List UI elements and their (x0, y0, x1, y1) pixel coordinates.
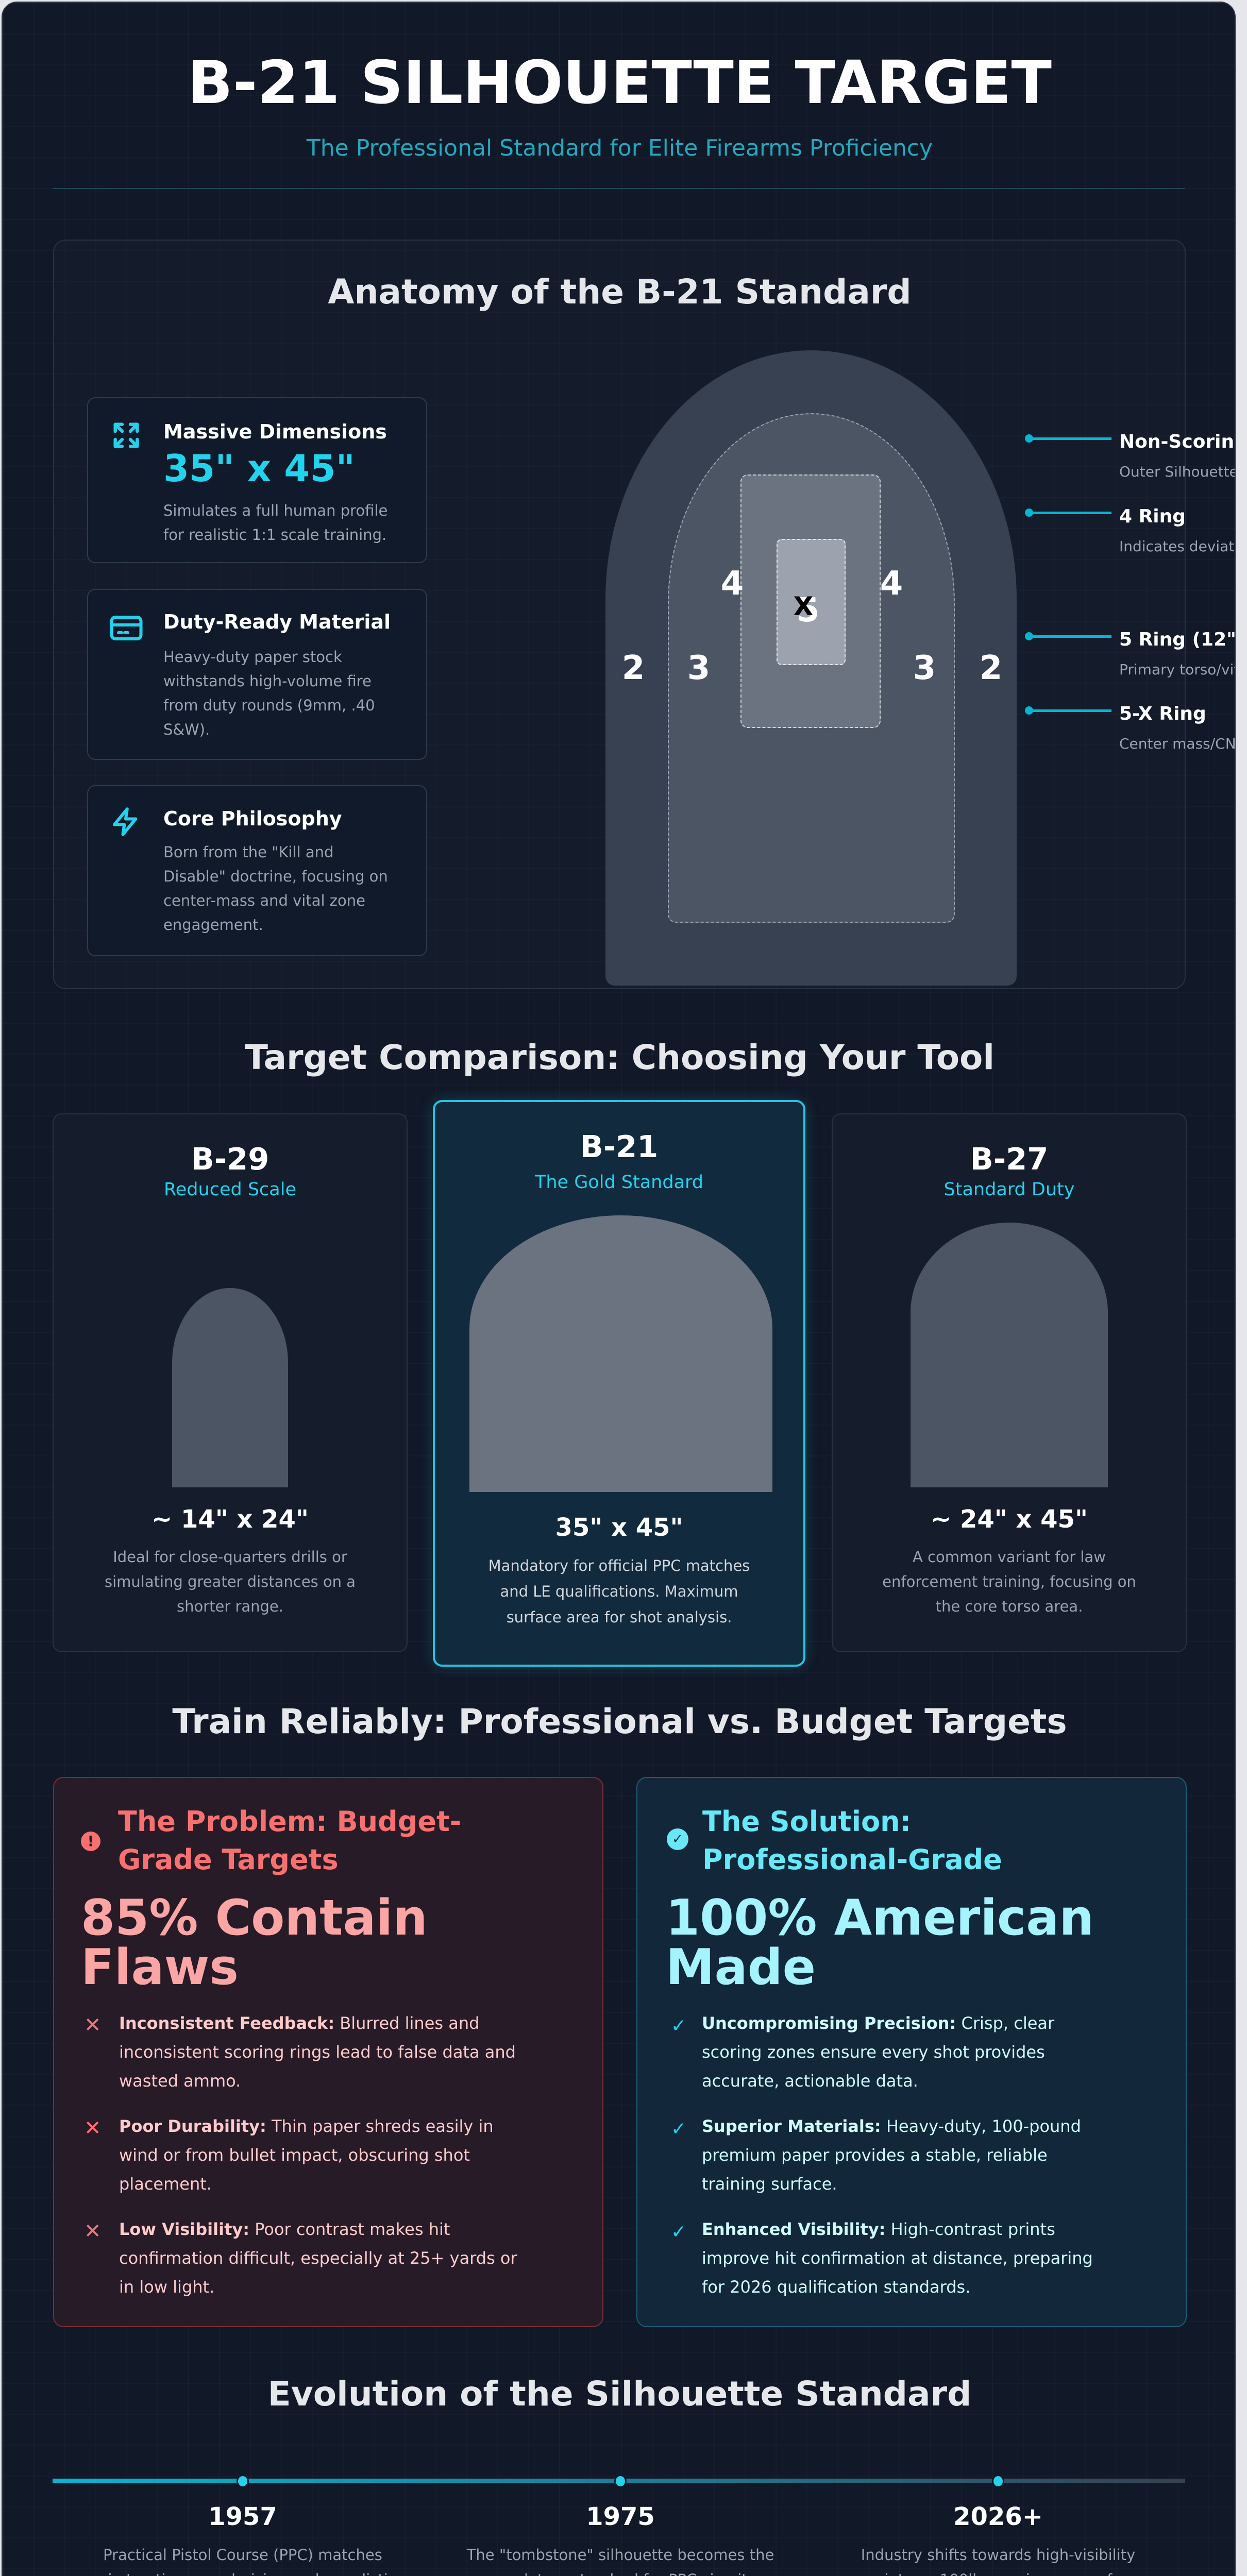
milestone: 1957: 1957 (208, 2502, 277, 2531)
card: B-21: surface area for shot analysis. (507, 1608, 732, 1626)
card: B-29: ~ 14" x 24" (151, 1505, 309, 1534)
silhouette: B-21 (469, 1215, 772, 1492)
icon: expand arrows (113, 422, 139, 448)
feature card: core philosophy (87, 785, 427, 956)
list: pro benefits: ✓ (671, 2119, 686, 2140)
list: pro benefits: improve hit confirmation at distance, preparing (702, 2248, 1093, 2268)
icon: check circle (667, 1828, 688, 1850)
heading: evolution: Evolution of the Silhouette Standard (268, 2374, 971, 2414)
callout: 5-X ring: 5-X Ring (1119, 703, 1206, 724)
target diagram: 4 (880, 565, 903, 603)
panel: budget problem: The Problem: Budget- (118, 1805, 461, 1838)
heading: comparison: Target Comparison: Choosing Your Tool (245, 1038, 995, 1077)
callout: 5-X ring (1025, 703, 1236, 752)
target diagram: 4 (721, 565, 744, 603)
milestone: 1975: The "tombstone" silhouette becomes the (467, 2546, 774, 2564)
card: B-29: shorter range. (177, 1598, 283, 1615)
callout: non-scoring (1025, 431, 1236, 480)
card: B-21 (433, 1100, 805, 1667)
card: B-27: Standard Duty (944, 1179, 1074, 1200)
list: budget flaws: in low light. (119, 2277, 214, 2297)
card: B-27: ~ 24" x 45" (931, 1505, 1088, 1534)
list: pro benefits: Enhanced Visibility: High-contrast prints (702, 2219, 1055, 2239)
card: B-29: Ideal for close-quarters drills or (113, 1548, 347, 1566)
panel: anatomy (53, 240, 1186, 989)
icon: card (110, 616, 142, 640)
target diagram: 3 (687, 649, 710, 687)
icon: check circle: ✓ (672, 1832, 683, 1847)
card: B-21: Mandatory for official PPC matches (488, 1557, 750, 1574)
list: budget flaws: ✕ (84, 2219, 102, 2243)
card: B-29 (53, 1113, 408, 1652)
silhouette: B-29 (172, 1288, 288, 1487)
list: pro benefits: ✓ (671, 2015, 686, 2037)
milestone: 1975 (467, 2502, 774, 2576)
panel: professional solution: Made (666, 1939, 816, 1996)
feature card: massive dimensions: Massive Dimensions (163, 420, 387, 443)
feature card: duty-ready material: from duty rounds (9mm, .40 (163, 697, 375, 714)
milestone: 2026+: 2026+ (953, 2502, 1043, 2531)
milestone: 2026+ (861, 2502, 1135, 2576)
heading: anatomy: Anatomy of the B-21 Standard (328, 272, 912, 312)
list: budget flaws: confirmation difficult, especially at 25+ yards or (119, 2248, 517, 2268)
list: pro benefits: premium paper provides a stable, reliable (702, 2145, 1048, 2165)
feature card: massive dimensions: 35" x 45" (163, 447, 355, 490)
target diagram: X (794, 591, 813, 621)
list: budget flaws (84, 2013, 517, 2297)
card: B-27: enforcement training, focusing on (882, 1573, 1136, 1590)
target diagram: 3 (913, 649, 936, 687)
list: budget flaws: wind or from bullet impact, obscuring shot (119, 2145, 470, 2165)
feature card: duty-ready material: S&W). (163, 721, 210, 738)
card: B-21: and LE qualifications. Maximum (500, 1583, 738, 1600)
list: budget flaws: Low Visibility: Poor contrast makes hit (119, 2219, 450, 2239)
target diagram: 5 (797, 591, 819, 630)
card: B-21: B-21 (580, 1129, 658, 1164)
target diagram: 2 (980, 649, 1002, 687)
silhouette: B-27 (911, 1223, 1108, 1487)
card: B-27: A common variant for law (913, 1548, 1106, 1566)
panel: budget problem (53, 1777, 603, 2327)
list: pro benefits: ✓ (671, 2222, 686, 2243)
panel: professional solution (636, 1777, 1187, 2327)
card: B-27: B-27 (970, 1141, 1048, 1177)
icon: alert: ! (88, 1833, 94, 1850)
list: budget flaws: ✕ (84, 2116, 102, 2140)
feature card: duty-ready material: Duty-Ready Material (163, 611, 391, 633)
target diagram: 2 (622, 649, 645, 687)
feature card: duty-ready material: Heavy-duty paper stock (163, 648, 342, 666)
callout: 4 ring: 4 Ring (1119, 506, 1186, 527)
milestone: 1975: 1975 (586, 2502, 655, 2531)
feature card: massive dimensions: Simulates a full human profile (163, 502, 387, 519)
card: B-29: simulating greater distances on a (105, 1573, 356, 1590)
timeline (53, 2476, 1185, 2486)
zone: 3 ring (668, 413, 955, 923)
feature card: duty-ready material: withstands high-volume fire (163, 672, 372, 690)
card: B-29: B-29 (191, 1141, 269, 1177)
feature card: massive dimensions (87, 397, 427, 563)
list: pro benefits: training surface. (702, 2174, 837, 2194)
callout: non-scoring: Outer Silhouette (1119, 463, 1236, 480)
heading: pro vs budget: Train Reliably: Professional vs. Budget Targets (172, 1702, 1067, 1741)
feature card: core philosophy: Disable" doctrine, focusing on (163, 868, 388, 885)
card: B-27 (832, 1113, 1187, 1652)
milestone: 1957 (89, 2502, 396, 2576)
list: budget flaws: inconsistent scoring rings lead to false data and (119, 2042, 516, 2062)
panel: professional solution: Professional-Grade (702, 1843, 1002, 1876)
panel: professional solution: The Solution: (702, 1805, 911, 1838)
list: pro benefits: Uncompromising Precision: Crisp, clear (702, 2013, 1054, 2033)
callout: 4 ring (1025, 506, 1236, 555)
icon: lightning (113, 807, 137, 836)
zone: 4 ring (740, 474, 881, 728)
list: pro benefits: Superior Materials: Heavy-duty, 100-pound (702, 2116, 1081, 2136)
milestone: 1957: Practical Pistol Course (PPC) matches (103, 2546, 382, 2564)
panel: professional solution: 100% American (666, 1890, 1094, 1946)
feature card: duty-ready material (87, 589, 427, 760)
feature card: core philosophy: Core Philosophy (163, 807, 342, 830)
callout: 5 ring (1025, 629, 1236, 678)
milestone: 2026+: Industry shifts towards high-visibility (861, 2546, 1135, 2564)
list: budget flaws: Inconsistent Feedback: Blurred lines and (119, 2013, 479, 2033)
subtitle: The Professional Standard for Elite Firearms Proficiency (307, 135, 933, 161)
panel: budget problem: Grade Targets (118, 1843, 339, 1876)
card: B-27: the core torso area. (936, 1598, 1083, 1615)
panel: budget problem: Flaws (81, 1939, 239, 1996)
list: pro benefits (671, 2013, 1093, 2297)
list: pro benefits: accurate, actionable data. (702, 2071, 918, 2091)
feature card: massive dimensions: for realistic 1:1 scale training. (163, 526, 386, 544)
list: pro benefits: for 2026 qualification standards. (702, 2277, 970, 2297)
list: budget flaws: wasted ammo. (119, 2071, 241, 2091)
feature card: core philosophy: engagement. (163, 916, 263, 934)
card: B-21: 35" x 45" (555, 1513, 683, 1542)
list: budget flaws: ✕ (84, 2013, 102, 2037)
target diagram (605, 350, 1017, 986)
feature card: core philosophy: center-mass and vital zone (163, 892, 365, 909)
list: budget flaws: Poor Durability: Thin paper shreds easily in (119, 2116, 494, 2136)
feature card: core philosophy: Born from the "Kill and (163, 843, 333, 861)
panel: budget problem: 85% Contain (81, 1890, 428, 1946)
card: B-29: Reduced Scale (164, 1179, 296, 1200)
icon: alert (81, 1832, 100, 1851)
title: B-21 SILHOUETTE TARGET (188, 48, 1052, 117)
zone: 5 ring (777, 539, 846, 665)
card: B-21: The Gold Standard (535, 1172, 703, 1193)
list: budget flaws: placement. (119, 2174, 212, 2194)
list: pro benefits: scoring zones ensure every shot provides (702, 2042, 1045, 2062)
